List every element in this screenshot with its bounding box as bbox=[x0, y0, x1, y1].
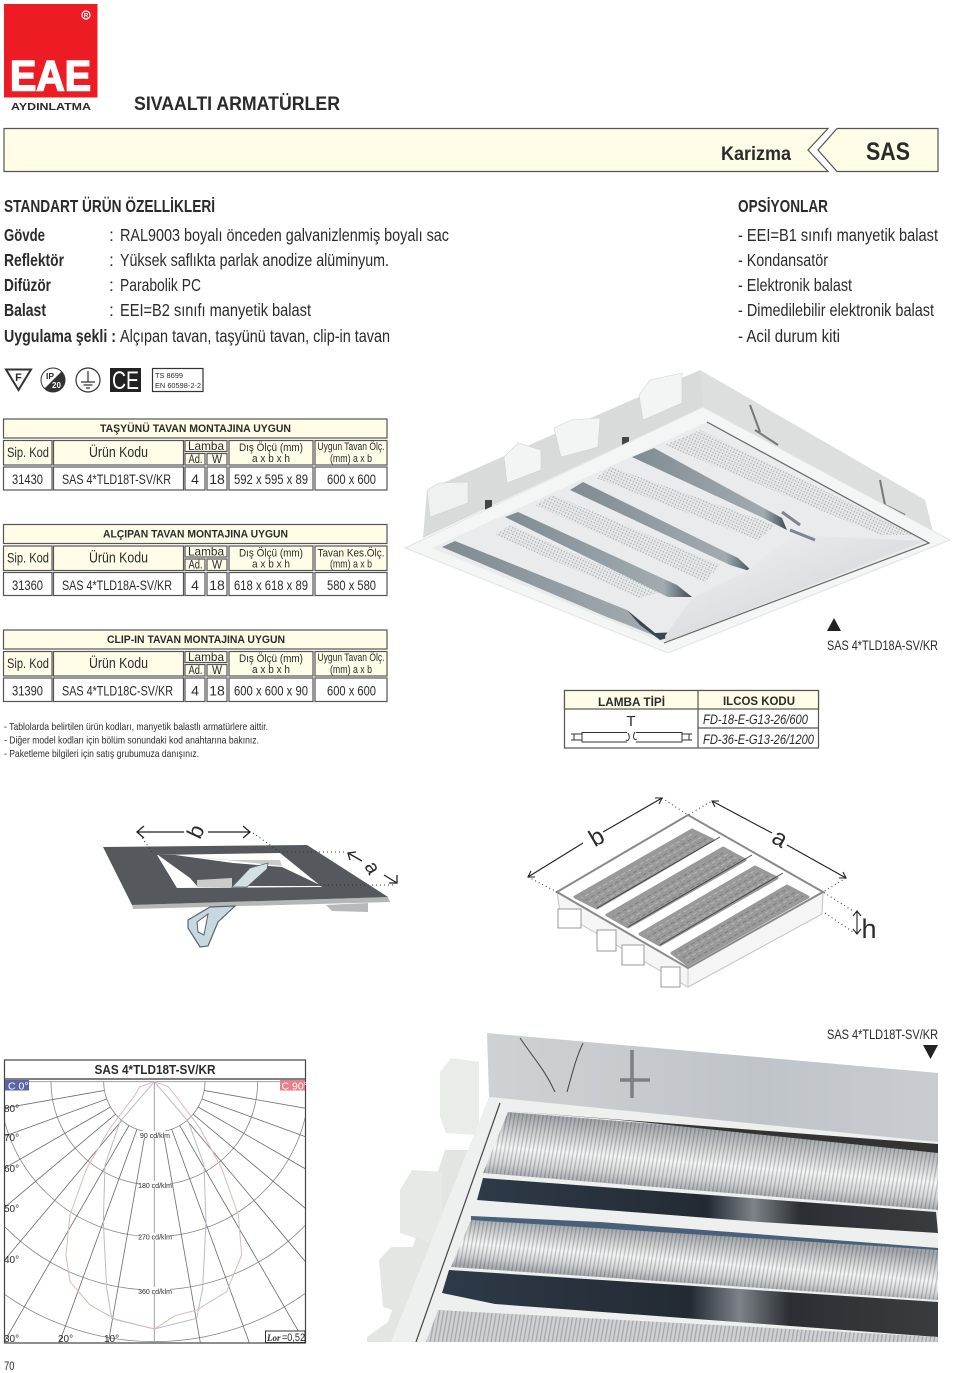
table: rock wool ceiling: SAS 4*TLD18T-SV/KR bbox=[62, 471, 171, 487]
text block: standard product features: : bbox=[109, 250, 114, 270]
table: plasterboard ceiling: (mm) a x b bbox=[330, 558, 372, 570]
table: plasterboard ceiling bbox=[4, 524, 387, 596]
text block: standard product features: Difüzör bbox=[4, 275, 51, 295]
table: lamp type: FD-18-E-G13-26/600 bbox=[703, 712, 808, 727]
diagram: ceiling cut-out with saw: b bbox=[182, 821, 210, 842]
certification icons bbox=[6, 367, 203, 395]
table: rock wool ceiling: 18 bbox=[209, 471, 225, 487]
text block: standard product features: STANDART ÜRÜN ÖZELLİKLERİ bbox=[4, 196, 215, 216]
polar grid and curves bbox=[5, 1081, 305, 1342]
table: clip-in ceiling: W bbox=[212, 665, 222, 677]
text block: standard product features: RAL9003 boyalı önceden galvanizlenmiş boyalı sac bbox=[120, 225, 449, 245]
text block: options: - Kondansatör bbox=[738, 250, 828, 270]
table: plasterboard ceiling: Tavan Kes.Ölç. bbox=[318, 548, 384, 560]
table: clip-in ceiling: a x b x h bbox=[252, 664, 290, 676]
arrow: dimension b bbox=[528, 798, 662, 877]
LOR value bbox=[266, 1331, 305, 1344]
arrow: dimension h bbox=[853, 911, 861, 934]
diagram: luminaire dimensions: b bbox=[584, 823, 609, 853]
logo: EAE Aydınlatma: EAE bbox=[10, 52, 91, 100]
table: rock wool ceiling: W bbox=[212, 454, 222, 466]
table: clip-in ceiling: CLIP-IN TAVAN MONTAJINA UYGUN bbox=[107, 634, 285, 646]
radial and angle labels: 70° bbox=[4, 1133, 19, 1144]
table: plasterboard ceiling: W bbox=[212, 560, 222, 572]
table: clip-in ceiling bbox=[4, 630, 387, 702]
table: rock wool ceiling: 4 bbox=[191, 471, 199, 487]
icon: connector boxes bbox=[558, 909, 680, 987]
certification icons: TS 8699 bbox=[155, 371, 183, 380]
radial and angle labels: 30° bbox=[4, 1334, 19, 1345]
table: rock wool ceiling: 31430 bbox=[12, 471, 43, 487]
table: lamp type: T bbox=[626, 713, 636, 730]
table: plasterboard ceiling: 618 x 618 x 89 bbox=[234, 577, 308, 593]
table: rock wool ceiling: Ürün Kodu bbox=[89, 443, 148, 461]
table: rock wool ceiling: Lamba bbox=[188, 439, 224, 453]
banner: Karizma / SAS: Karizma bbox=[721, 144, 791, 165]
page number: 70 bbox=[4, 1359, 15, 1373]
caption with down arrow: SAS 4*TLD18T-SV/KR bbox=[827, 1026, 938, 1059]
LOR value: Lor bbox=[266, 1333, 281, 1343]
table: lamp type bbox=[564, 690, 818, 748]
text block: standard product features: EEI=B2 sınıfı manyetik balast bbox=[120, 300, 311, 320]
table: plasterboard ceiling: Dış Ölçü (mm) bbox=[239, 548, 303, 560]
table: plasterboard ceiling: a x b x h bbox=[252, 558, 290, 570]
table: lamp type: FD-36-E-G13-26/1200 bbox=[703, 732, 814, 747]
caption with up arrow: SAS 4*TLD18A-SV/KR bbox=[827, 618, 938, 653]
table: clip-in ceiling: Sip. Kod bbox=[7, 655, 49, 671]
table: rock wool ceiling: (mm) a x b bbox=[330, 453, 372, 465]
table: plasterboard ceiling: SAS 4*TLD18A-SV/KR bbox=[62, 577, 172, 593]
table: plasterboard ceiling: ALÇIPAN TAVAN MONTAJINA UYGUN bbox=[103, 528, 288, 540]
notes bbox=[4, 721, 268, 760]
certification icons: EN 60598-2-2 bbox=[155, 381, 201, 390]
logo: EAE Aydınlatma: AYDINLATMA bbox=[11, 102, 91, 113]
radial and angle labels: 90 cd/klm bbox=[140, 1133, 170, 1140]
notes: - Tablolarda belirtilen ürün kodları, manyetik balastlı armatürlere aittir. bbox=[4, 721, 268, 733]
LOR value: =0,52 bbox=[282, 1332, 305, 1344]
text block: options: - Acil durum kiti bbox=[738, 326, 840, 346]
radial and angle labels: 40° bbox=[4, 1255, 19, 1266]
text block: options: OPSİYONLAR bbox=[738, 196, 828, 216]
table: clip-in ceiling: 600 x 600 x 90 bbox=[234, 682, 308, 698]
table: rock wool ceiling: a x b x h bbox=[252, 453, 290, 465]
radial and angle labels: 180 cd/klm bbox=[138, 1183, 172, 1190]
radial and angle labels: 360 cd/klm bbox=[138, 1289, 172, 1296]
icon: mounting cross bbox=[620, 1050, 650, 1098]
chart title: SAS 4*TLD18T-SV/KR bbox=[94, 1063, 216, 1077]
text block: standard product features bbox=[4, 196, 449, 346]
table: clip-in ceiling: (mm) a x b bbox=[330, 664, 372, 676]
text block: standard product features: : bbox=[109, 300, 114, 320]
text block: standard product features: : bbox=[109, 225, 114, 245]
radial and angle labels: 270 cd/klm bbox=[138, 1234, 172, 1242]
legend: C 90: C 90° bbox=[282, 1080, 308, 1092]
radial and angle labels bbox=[4, 1104, 172, 1345]
notes: - Diğer model kodları için bölüm sonundaki kod anahtarına bakınız. bbox=[4, 734, 259, 746]
table: rock wool ceiling: Dış Ölçü (mm) bbox=[239, 442, 303, 454]
chart: polar light distribution bbox=[4, 1059, 306, 1344]
table: clip-in ceiling: Ad. bbox=[188, 665, 202, 677]
text block: standard product features: : bbox=[109, 275, 114, 295]
text block: standard product features: Balast bbox=[4, 300, 46, 320]
diagram: ceiling cut-out with saw bbox=[103, 821, 397, 947]
table: plasterboard ceiling: 4 bbox=[191, 577, 199, 593]
diagram: luminaire dimensions: h bbox=[861, 914, 877, 944]
table: rock wool ceiling: Sip. Kod bbox=[7, 444, 49, 460]
text block: standard product features: Yüksek saflıkta parlak anodize alüminyum. bbox=[120, 250, 389, 270]
table: plasterboard ceiling: 31360 bbox=[12, 577, 43, 593]
table: plasterboard ceiling: Sip. Kod bbox=[7, 550, 49, 566]
table: rock wool ceiling: 592 x 595 x 89 bbox=[234, 471, 308, 487]
photo: SAS 4*TLD18A-SV/KR luminaire bbox=[405, 370, 950, 653]
diagram: luminaire dimensions bbox=[528, 798, 877, 987]
radial and angle labels: 10° bbox=[104, 1334, 119, 1345]
table: clip-in ceiling: Ürün Kodu bbox=[89, 654, 148, 672]
table: clip-in ceiling: 4 bbox=[191, 682, 199, 698]
text block: standard product features: Uygulama şekli : bbox=[4, 326, 116, 346]
table: plasterboard ceiling: 18 bbox=[209, 577, 225, 593]
text block: options bbox=[738, 196, 938, 346]
table: rock wool ceiling: Uygun Tavan Ölç. bbox=[318, 441, 384, 453]
arrow: dimension b bbox=[137, 826, 250, 838]
table: rock wool ceiling: Ad. bbox=[188, 454, 202, 466]
table: plasterboard ceiling: Ad. bbox=[188, 560, 202, 572]
table: clip-in ceiling: 18 bbox=[209, 682, 225, 698]
text block: standard product features: Parabolik PC bbox=[120, 275, 201, 295]
logo: EAE Aydınlatma: R bbox=[84, 14, 89, 20]
banner: Karizma / SAS bbox=[4, 128, 938, 172]
radial and angle labels: 50° bbox=[4, 1204, 19, 1215]
table: lamp type: ILCOS KODU bbox=[723, 694, 795, 708]
table: rock wool ceiling: 600 x 600 bbox=[327, 471, 376, 487]
table: clip-in ceiling: 31390 bbox=[12, 682, 43, 698]
table: clip-in ceiling: Uygun Tavan Ölç. bbox=[318, 652, 384, 664]
legend: C 0: C 0° bbox=[8, 1080, 29, 1092]
table: lamp type: LAMBA TİPİ bbox=[598, 694, 665, 709]
diagram: luminaire dimensions: a bbox=[767, 823, 793, 854]
table: clip-in ceiling: Lamba bbox=[188, 650, 224, 664]
table: clip-in ceiling: Dış Ölçü (mm) bbox=[239, 653, 303, 665]
icon: fluorescent tube bbox=[571, 732, 692, 742]
radial and angle labels: 80° bbox=[4, 1104, 19, 1115]
title: SIVAALTI ARMATÜRLER bbox=[134, 94, 340, 115]
table: rock wool ceiling: TAŞYÜNÜ TAVAN MONTAJINA UYGUN bbox=[100, 422, 291, 435]
certification icons: 20 bbox=[52, 381, 61, 390]
text block: standard product features: Alçıpan tavan, taşyünü tavan, clip-in tavan bbox=[120, 326, 390, 346]
certification icons: IP bbox=[46, 371, 54, 381]
arrow: dimension a bbox=[712, 801, 846, 878]
table: plasterboard ceiling: Ürün Kodu bbox=[89, 548, 148, 566]
photo: SAS 4*TLD18T-SV/KR close-up bbox=[367, 1033, 938, 1342]
radial and angle labels: 60° bbox=[4, 1164, 19, 1175]
logo: EAE Aydınlatma bbox=[4, 4, 98, 113]
text block: standard product features: Reflektör bbox=[4, 250, 64, 270]
radial and angle labels: 20° bbox=[58, 1334, 73, 1345]
arrow: dimension a bbox=[348, 852, 397, 883]
banner: Karizma / SAS: SAS bbox=[866, 138, 910, 166]
text block: standard product features: Gövde bbox=[4, 225, 45, 245]
table: plasterboard ceiling: Lamba bbox=[188, 544, 224, 558]
table: plasterboard ceiling: 580 x 580 bbox=[327, 577, 376, 593]
certification icons: CE bbox=[112, 367, 139, 395]
diagram: ceiling cut-out with saw: a bbox=[360, 858, 385, 879]
table: clip-in ceiling: 600 x 600 bbox=[327, 682, 376, 698]
table: clip-in ceiling: SAS 4*TLD18C-SV/KR bbox=[62, 682, 173, 698]
table: rock wool ceiling bbox=[4, 419, 387, 490]
text block: options: - Elektronik balast bbox=[738, 275, 852, 295]
notes: - Paketleme bilgileri için satış grubumuza danışınız. bbox=[4, 748, 199, 760]
certification icons: F bbox=[15, 372, 22, 384]
